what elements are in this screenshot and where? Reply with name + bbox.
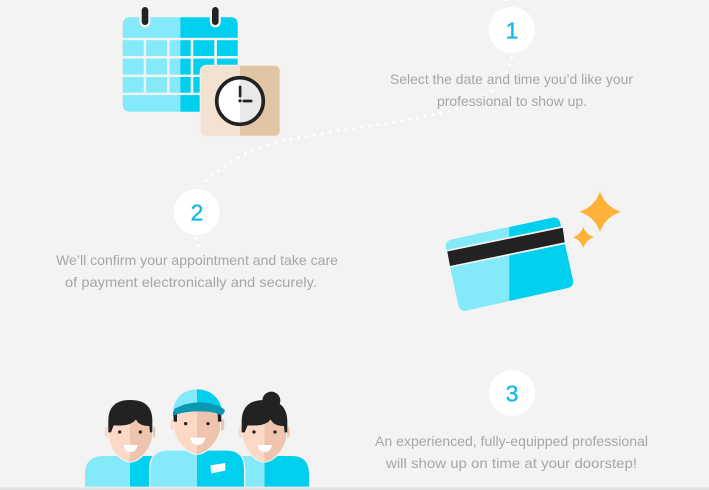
step 1 text: professional to show up. — [437, 93, 587, 109]
step 2 number badge: 2 — [191, 200, 203, 226]
icon: sparkles — [573, 192, 621, 248]
person: center technician with cap — [149, 389, 245, 487]
step 1 number badge: 1 — [506, 18, 518, 44]
icon: three professionals — [85, 389, 309, 487]
step 1 text: Select the date and time you’d like your — [390, 71, 633, 87]
step 1 text — [390, 71, 633, 109]
icon: clock tile — [200, 65, 281, 137]
step 2 text: We’ll confirm your appointment and take care — [56, 252, 338, 268]
person: left technician — [85, 400, 155, 487]
step 2 text — [56, 252, 338, 290]
dotted connector path — [197, 0, 512, 248]
step 3 text: will show up on time at your doorstep! — [385, 455, 637, 471]
step 2 number badge — [174, 189, 220, 235]
step 3 text: An experienced, fully-equipped professional — [375, 433, 648, 449]
person: right technician — [239, 392, 309, 487]
step 3 text — [375, 433, 648, 471]
step 1 number badge — [489, 7, 535, 53]
step 3 number badge: 3 — [506, 380, 518, 406]
icon: calendar — [123, 6, 238, 112]
icon: credit card — [446, 218, 573, 311]
step 3 number badge — [489, 370, 535, 416]
step 2 text: of payment electronically and securely. — [65, 274, 317, 290]
